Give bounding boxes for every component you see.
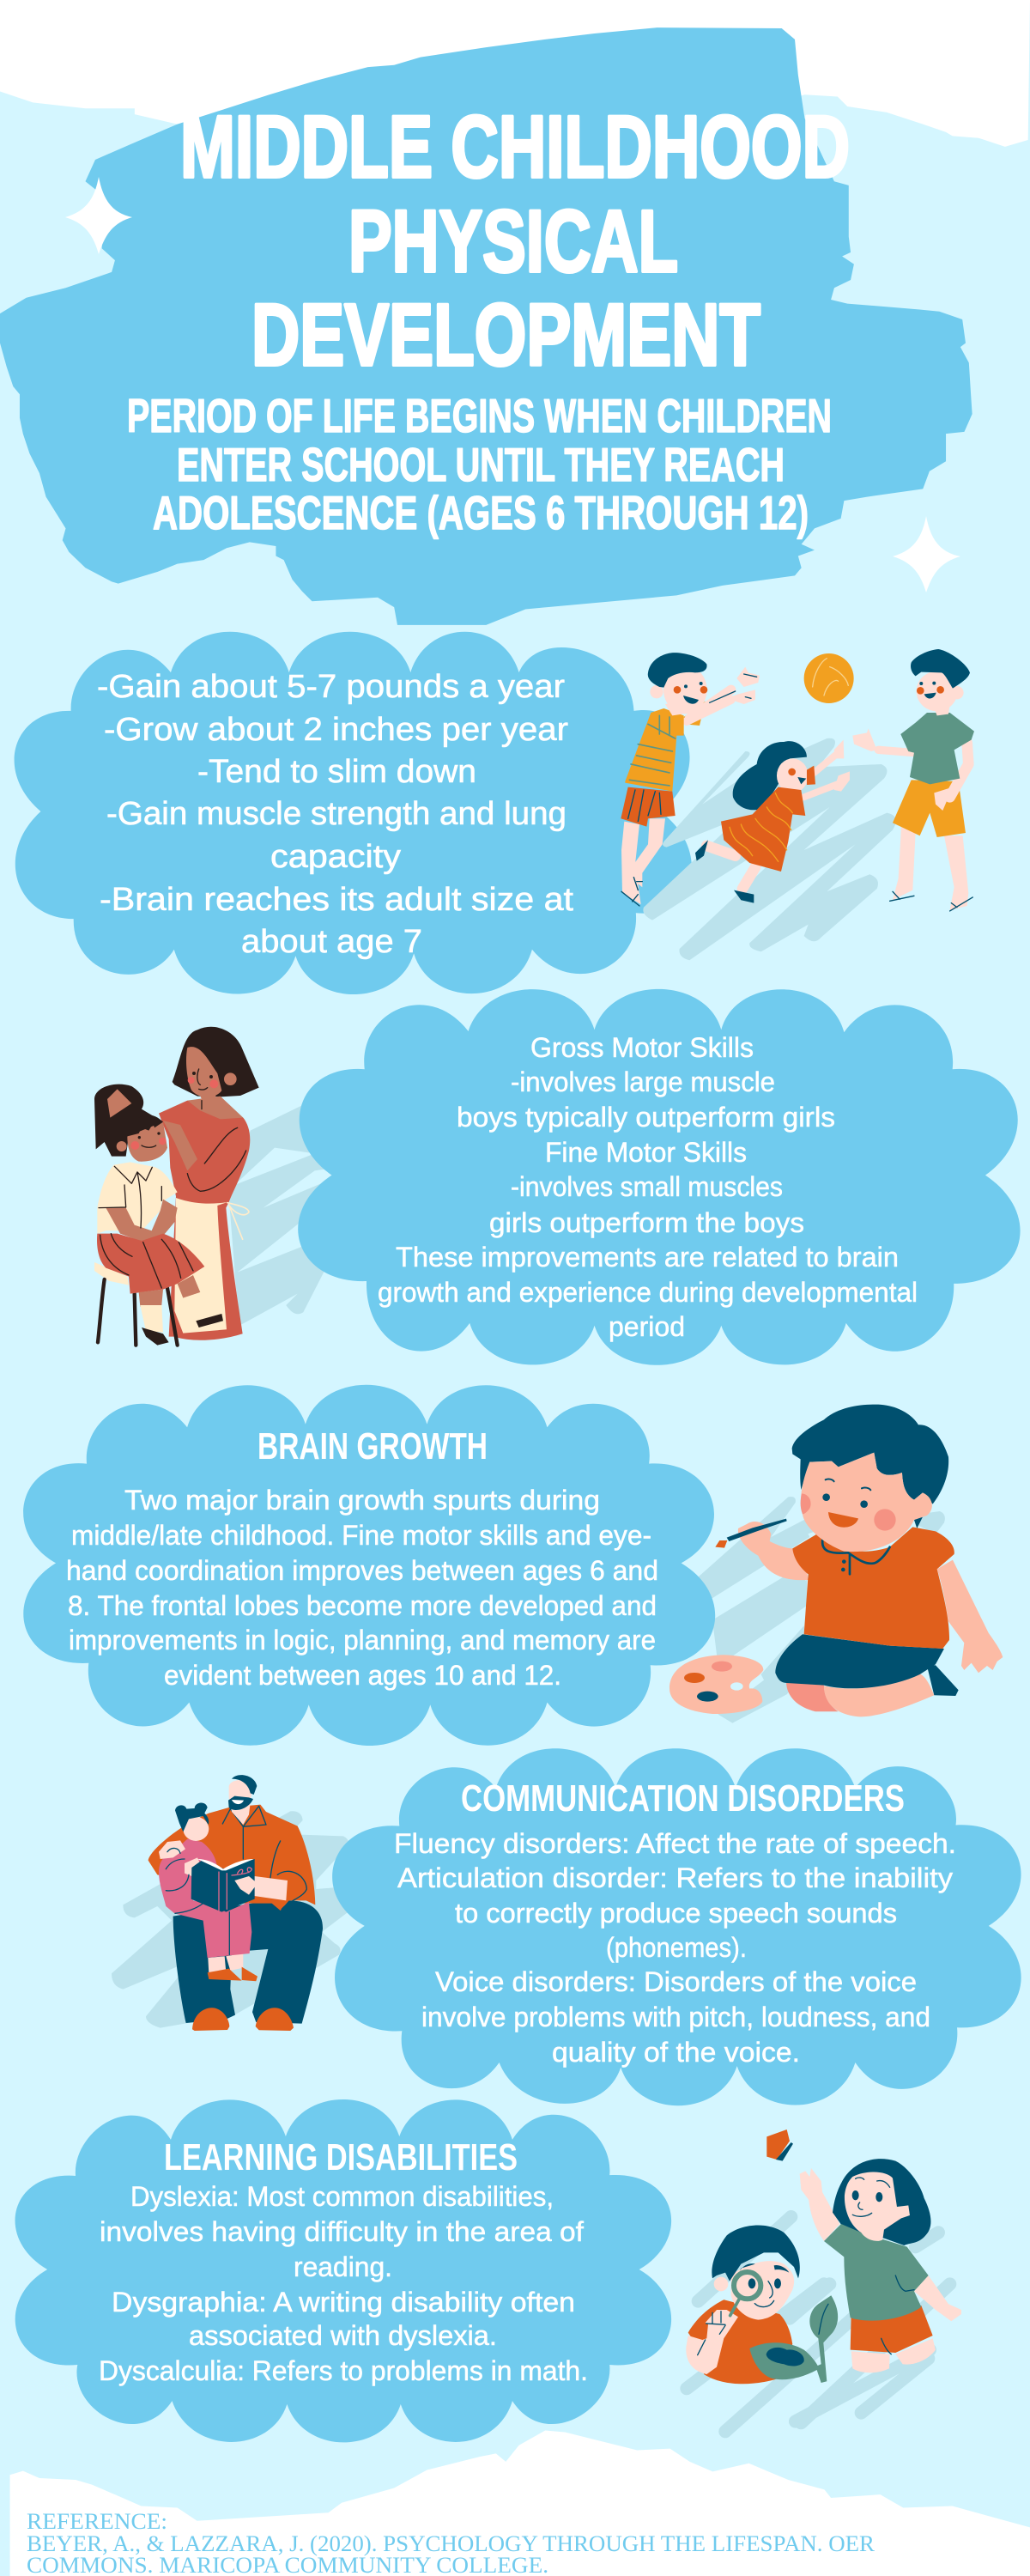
- learning disabilities heading and text: Dysgraphia: A writing disability often: [112, 2287, 575, 2318]
- boy: [686, 2225, 800, 2384]
- reference text: [27, 2509, 876, 2576]
- reference text: BEYER, A., & LAZZARA, J. (2020). PSYCHOLOGY THROUGH THE LIFESPAN. OER: [27, 2531, 876, 2556]
- growth facts text: -Gain about 5-7 pounds a year: [97, 669, 565, 705]
- subtitle: [127, 389, 832, 539]
- motor skills text: growth and experience during developmental: [378, 1277, 918, 1308]
- mother: [159, 1027, 259, 1340]
- brain growth heading and text: hand coordination improves between ages 6 and: [66, 1555, 658, 1586]
- panel: brain growth cloud: [23, 1385, 715, 1746]
- girl: [800, 2159, 961, 2372]
- growth facts text: about age 7: [241, 924, 422, 960]
- growth facts text: -Gain muscle strength and lung: [106, 796, 566, 832]
- panel: communication disorders cloud: [332, 1748, 1021, 2105]
- growth facts text: -Grow about 2 inches per year: [104, 712, 568, 748]
- book: [191, 1859, 258, 1912]
- growth facts text: -Brain reaches its adult size at: [100, 882, 573, 918]
- learning disabilities heading and text: Dyscalculia: Refers to problems in math.: [99, 2355, 588, 2386]
- stool: [94, 1262, 178, 1346]
- motor skills text: girls outperform the boys: [489, 1207, 804, 1238]
- subtitle: ADOLESCENCE (AGES 6 THROUGH 12): [153, 486, 809, 539]
- communication disorders heading and text: involve problems with pitch, loudness, and: [421, 2002, 930, 2032]
- icon: sparkle left: [65, 177, 132, 254]
- title: [180, 98, 850, 384]
- girl: [695, 740, 850, 903]
- communication disorders heading and text: COMMUNICATION DISORDERS: [461, 1777, 905, 1820]
- illustration: children playing ball: [621, 649, 974, 960]
- header brush blob: [0, 27, 972, 625]
- brain growth heading and text: 8. The frontal lobes become more developed and: [68, 1590, 657, 1621]
- motor skills text: These improvements are related to brain: [396, 1242, 899, 1273]
- white torn paper bottom edge: [9, 2431, 1030, 2576]
- learning disabilities heading and text: Dyslexia: Most common disabilities,: [130, 2181, 554, 2212]
- scribble behind children exploring: [687, 2217, 950, 2432]
- ball: [804, 653, 854, 703]
- communication disorders heading and text: (phonemes).: [606, 1932, 747, 1963]
- motor skills text: period: [609, 1311, 685, 1342]
- learning disabilities heading and text: reading.: [294, 2251, 392, 2282]
- boy one: [621, 653, 760, 906]
- brain growth heading and text: BRAIN GROWTH: [258, 1425, 488, 1467]
- learning disabilities heading and text: [99, 2136, 588, 2386]
- panel: learning disabilities cloud: [15, 2099, 671, 2442]
- leaves: [749, 2295, 838, 2383]
- illustration: boy painting: [670, 1405, 1003, 1716]
- scribble behind mother and daughter: [229, 1103, 335, 1325]
- growth facts text: [97, 669, 573, 960]
- motor skills text: Gross Motor Skills: [530, 1032, 754, 1063]
- motor skills text: [378, 1032, 918, 1342]
- illustration: father reading to daughter: [148, 1775, 323, 2031]
- scribble behind painting boy: [698, 1497, 945, 1723]
- communication disorders heading and text: [394, 1777, 956, 2068]
- learning disabilities heading and text: associated with dyslexia.: [189, 2320, 497, 2351]
- palette: [670, 1655, 763, 1714]
- father: [148, 1775, 323, 2031]
- motor skills text: boys typically outperform girls: [457, 1102, 835, 1133]
- growth facts text: capacity: [270, 839, 401, 875]
- brain growth heading and text: middle/late childhood. Fine motor skills and eye-: [71, 1520, 651, 1551]
- growth facts text: -Tend to slim down: [197, 754, 476, 790]
- panel: motor skills cloud: [298, 989, 1021, 1365]
- illustration: children exploring nature: [686, 2129, 961, 2384]
- learning disabilities heading and text: involves having difficulty in the area of: [100, 2216, 584, 2247]
- panel: growth facts cloud: [15, 632, 692, 994]
- motor skills text: -involves large muscle: [511, 1066, 775, 1097]
- brain growth heading and text: Two major brain growth spurts during: [124, 1485, 600, 1516]
- reference text: REFERENCE:: [27, 2509, 167, 2534]
- scribble behind father and daughter: [112, 1811, 352, 2028]
- communication disorders heading and text: Voice disorders: Disorders of the voice: [435, 1966, 917, 1997]
- motor skills text: -involves small muscles: [511, 1171, 783, 1202]
- white torn paper top edge: [0, 0, 1030, 147]
- boy two: [852, 649, 974, 911]
- learning disabilities heading and text: LEARNING DISABILITIES: [164, 2136, 518, 2178]
- butterfly: [766, 2129, 793, 2161]
- magnifying glass: [730, 2272, 760, 2316]
- communication disorders heading and text: to correctly produce speech sounds: [455, 1898, 897, 1929]
- subtitle: ENTER SCHOOL UNTIL THEY REACH: [177, 438, 785, 491]
- brain growth heading and text: evident between ages 10 and 12.: [164, 1660, 561, 1691]
- scribble: [643, 738, 896, 960]
- communication disorders heading and text: Articulation disorder: Refers to the inability: [397, 1862, 953, 1893]
- communication disorders heading and text: quality of the voice.: [552, 2037, 800, 2068]
- daughter: [94, 1084, 223, 1346]
- paint brush: [715, 1519, 787, 1548]
- icon: sparkle right: [893, 516, 960, 592]
- brain growth heading and text: [66, 1425, 658, 1691]
- daughter: [159, 1802, 258, 1981]
- communication disorders heading and text: Fluency disorders: Affect the rate of speech.: [394, 1828, 956, 1859]
- title: DEVELOPMENT: [251, 286, 760, 384]
- title: PHYSICAL: [348, 192, 678, 290]
- illustration: mother and daughter: [94, 1027, 259, 1346]
- brain growth heading and text: improvements in logic, planning, and memory are: [69, 1625, 656, 1656]
- motor skills text: Fine Motor Skills: [545, 1137, 747, 1168]
